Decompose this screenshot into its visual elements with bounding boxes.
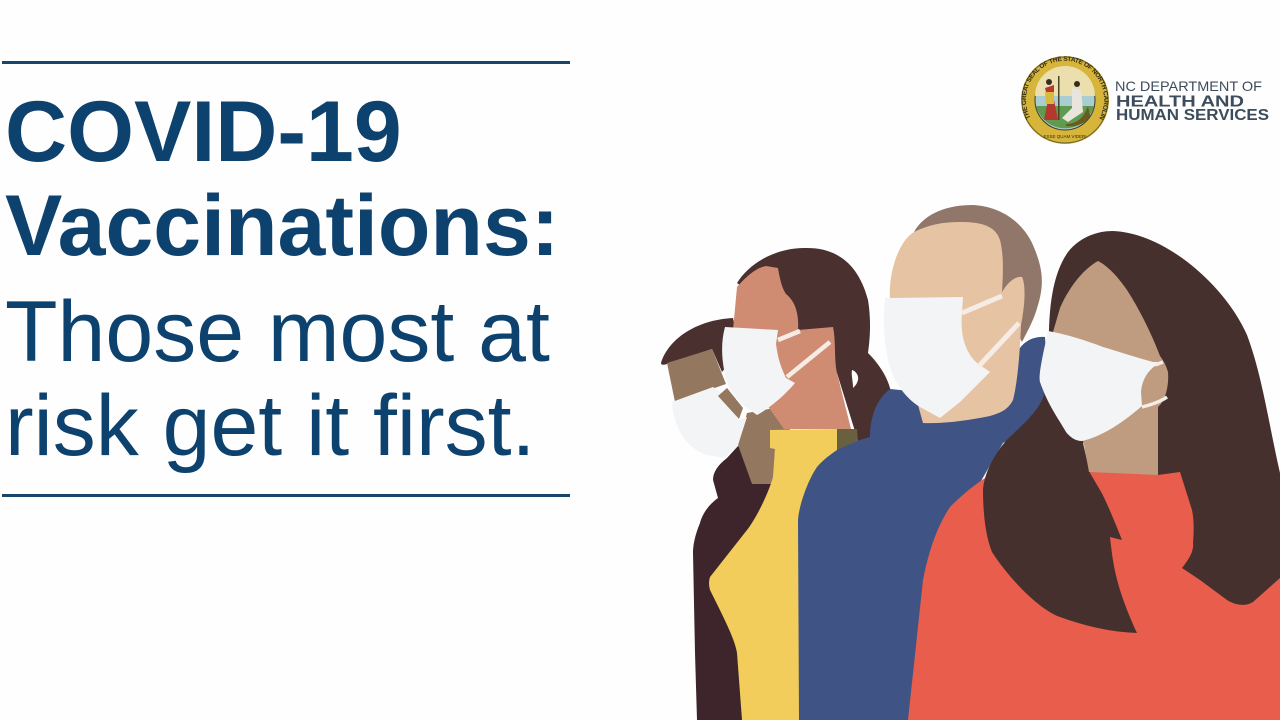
icon: state seal: ESSE QUAM VIDERI [1043, 134, 1087, 139]
logo text [1115, 78, 1269, 124]
title: Vaccinations: [5, 178, 559, 274]
title: Those most at [5, 284, 550, 380]
logo: NC DHHS [1021, 56, 1269, 144]
logo text: HEALTH AND [1116, 94, 1244, 110]
icon: state seal [1021, 56, 1109, 144]
person 3: blue sweater [798, 205, 1050, 720]
mask [1040, 331, 1162, 441]
logo text: NC DEPARTMENT OF [1115, 78, 1262, 94]
illustration: four masked people [661, 205, 1280, 720]
title: risk get it first. [5, 378, 535, 474]
person 2: yellow top [709, 248, 891, 720]
person 4: red sweater [908, 231, 1280, 720]
mask [884, 297, 990, 418]
top rule [2, 61, 570, 64]
bottom rule [2, 494, 570, 497]
title [5, 84, 559, 474]
person 1: back figure [661, 318, 800, 720]
mask [672, 387, 747, 458]
logo text: HUMAN SERVICES [1116, 107, 1269, 124]
title: COVID-19 [5, 84, 402, 180]
mask [722, 327, 795, 415]
